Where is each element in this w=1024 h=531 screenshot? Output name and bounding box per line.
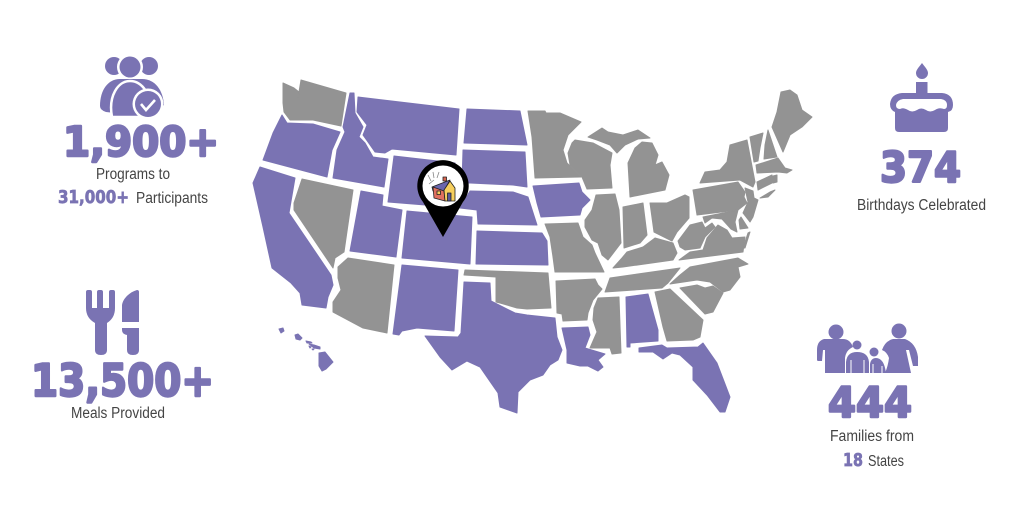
stat: families [817,324,918,471]
caption: participants: 31,000+ [58,188,129,208]
caption: 18 states: 18 [843,451,863,471]
states with programs [253,93,730,413]
stat: programs [58,54,219,208]
icon: house [428,172,455,201]
icon: people with check [100,54,164,120]
states without programs [283,80,812,354]
caption: meals provided: Meals Provided [71,405,165,422]
stat: meals [31,290,214,422]
icon: birthday cake [890,63,953,132]
caption: programs to: Programs to [96,166,170,183]
caption: participants [58,188,208,208]
caption: birthdays celebrated: Birthdays Celebrated [857,197,986,214]
heading: 13,500+: 13,500+ [31,356,214,407]
heading: 444: 444 [828,378,912,427]
map of the United States [253,80,812,413]
caption: participants: Participants [136,190,208,207]
caption: 18 states [843,451,904,471]
heading: 1,900+: 1,900+ [63,118,219,166]
location pin [417,160,469,237]
heading: 374: 374 [880,143,961,192]
icon: fork and knife [86,290,139,355]
stat: birthdays [857,63,986,214]
caption: families from: Families from [830,428,914,445]
caption: 18 states: States [868,453,904,470]
Hawaii [279,328,333,371]
icon: family [817,324,918,373]
